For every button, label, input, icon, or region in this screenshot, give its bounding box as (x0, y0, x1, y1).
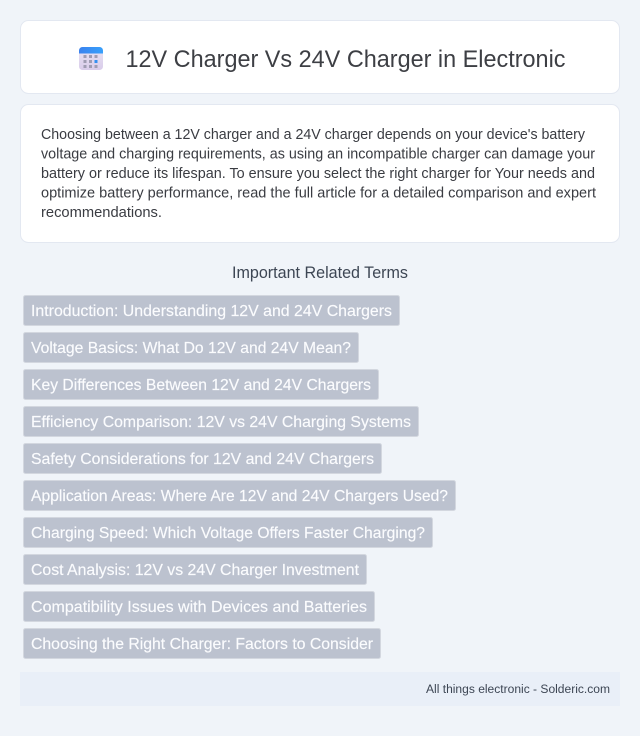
term 5 (24, 444, 382, 474)
text block: introduction: Choosing between a 12V charger and a 24V charger depends on your device's battery (41, 127, 586, 143)
term 9 (24, 592, 374, 622)
term 6 (24, 480, 456, 510)
term 1 (24, 296, 400, 326)
term 7: Charging Speed: Which Voltage Offers Faster Charging? (31, 525, 425, 542)
term 3: Key Differences Between 12V and 24V Chargers (31, 377, 371, 394)
panel: header (20, 20, 620, 94)
footer (20, 672, 620, 706)
term 5: Safety Considerations for 12V and 24V Chargers (31, 451, 374, 468)
panel: introduction (20, 104, 620, 242)
term 10 (24, 628, 380, 658)
term 8 (24, 554, 366, 584)
term 10: Choosing the Right Charger: Factors to Consider (31, 636, 373, 653)
term 9: Compatibility Issues with Devices and Batteries (31, 599, 367, 616)
term 1: Introduction: Understanding 12V and 24V Chargers (31, 303, 392, 320)
footer: All things electronic - Solderic.com (426, 682, 610, 696)
text block: introduction: battery or reduce its lifespan. To ensure you select the right charger for Your needs and (41, 166, 595, 182)
term 8: Cost Analysis: 12V vs 24V Charger Investment (31, 562, 360, 579)
text block: introduction: voltage and charging requirements, as using an incompatible charger can damage your (41, 146, 595, 162)
title: 12V Charger Vs 24V Charger in Electronic (126, 46, 566, 73)
term 7 (24, 518, 432, 548)
text block: introduction: optimize battery performance, read the full article for a detailed comparison and expert (41, 186, 596, 202)
term 3 (24, 370, 378, 400)
term 6: Application Areas: Where Are 12V and 24V Chargers Used? (31, 488, 448, 505)
term 4: Efficiency Comparison: 12V vs 24V Charging Systems (31, 414, 411, 431)
icon: calendar (79, 47, 103, 70)
term 2 (24, 332, 358, 362)
list: related terms (24, 296, 456, 658)
heading: important related terms: Important Related Terms (232, 264, 408, 282)
text block: introduction: recommendations. (41, 205, 162, 221)
text block: introduction (41, 127, 596, 221)
term 2: Voltage Basics: What Do 12V and 24V Mean? (31, 340, 351, 357)
term 4 (24, 406, 418, 436)
